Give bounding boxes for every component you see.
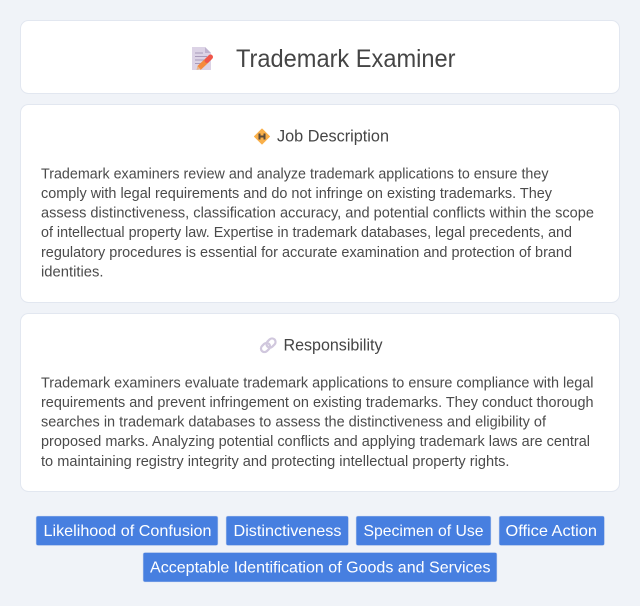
tag: specimen of use xyxy=(356,516,491,546)
text block: job description: comply with legal requirements and do not infringe on existing trademarks. They xyxy=(41,186,553,202)
text block: job description: of intellectual property law. Expertise in trademark databases, legal precedents, and xyxy=(41,225,572,241)
icon: document with pencil xyxy=(192,47,211,70)
tag: likelihood of confusion: Likelihood of Confusion xyxy=(44,523,212,540)
text block: responsibility: to maintaining registry integrity and protecting intellectual property rights. xyxy=(41,454,510,470)
text block: responsibility: requirements and prevent infringement on existing trademarks. They conduct thorough xyxy=(41,395,594,411)
text block: responsibility: searches in trademark databases to assess the distinctiveness and eligibility of xyxy=(41,415,547,431)
text block: job description: assess distinctiveness, classification accuracy, and potential conflicts within the scope xyxy=(41,206,594,222)
heading: job description: Job Description xyxy=(277,128,389,146)
text block: job description: regulatory procedures is essential for accurate examination and protection of brand xyxy=(41,245,572,261)
text block: job description: identities. xyxy=(41,264,104,280)
tag: distinctiveness: Distinctiveness xyxy=(234,523,342,540)
text block: responsibility: proposed marks. Analyzing potential conflicts and applying trademark laws are central xyxy=(41,434,590,450)
title: Trademark Examiner xyxy=(236,45,456,73)
heading: responsibility: Responsibility xyxy=(284,336,383,354)
panel: job description xyxy=(20,104,620,302)
tag: likelihood of confusion xyxy=(36,516,218,546)
tag: distinctiveness xyxy=(226,516,348,546)
text block: responsibility: Trademark examiners evaluate trademark applications to ensure compliance with legal xyxy=(41,376,594,392)
tag list xyxy=(36,516,604,582)
icon: job diamond xyxy=(254,129,270,144)
icon: link xyxy=(259,337,277,354)
tag: specimen of use: Specimen of Use xyxy=(364,523,484,540)
panel: responsibility xyxy=(20,314,620,492)
tag: office action xyxy=(499,516,604,546)
text block: job description xyxy=(41,166,594,280)
panel: title card xyxy=(20,20,620,94)
tag: acceptable identification of goods and services xyxy=(143,552,497,582)
tag: office action: Office Action xyxy=(506,523,597,540)
tag: acceptable identification of goods and services: Acceptable Identification of Goods and Services xyxy=(150,560,490,576)
text block: responsibility xyxy=(41,376,594,470)
text block: job description: Trademark examiners review and analyze trademark applications to ensure they xyxy=(41,166,549,182)
